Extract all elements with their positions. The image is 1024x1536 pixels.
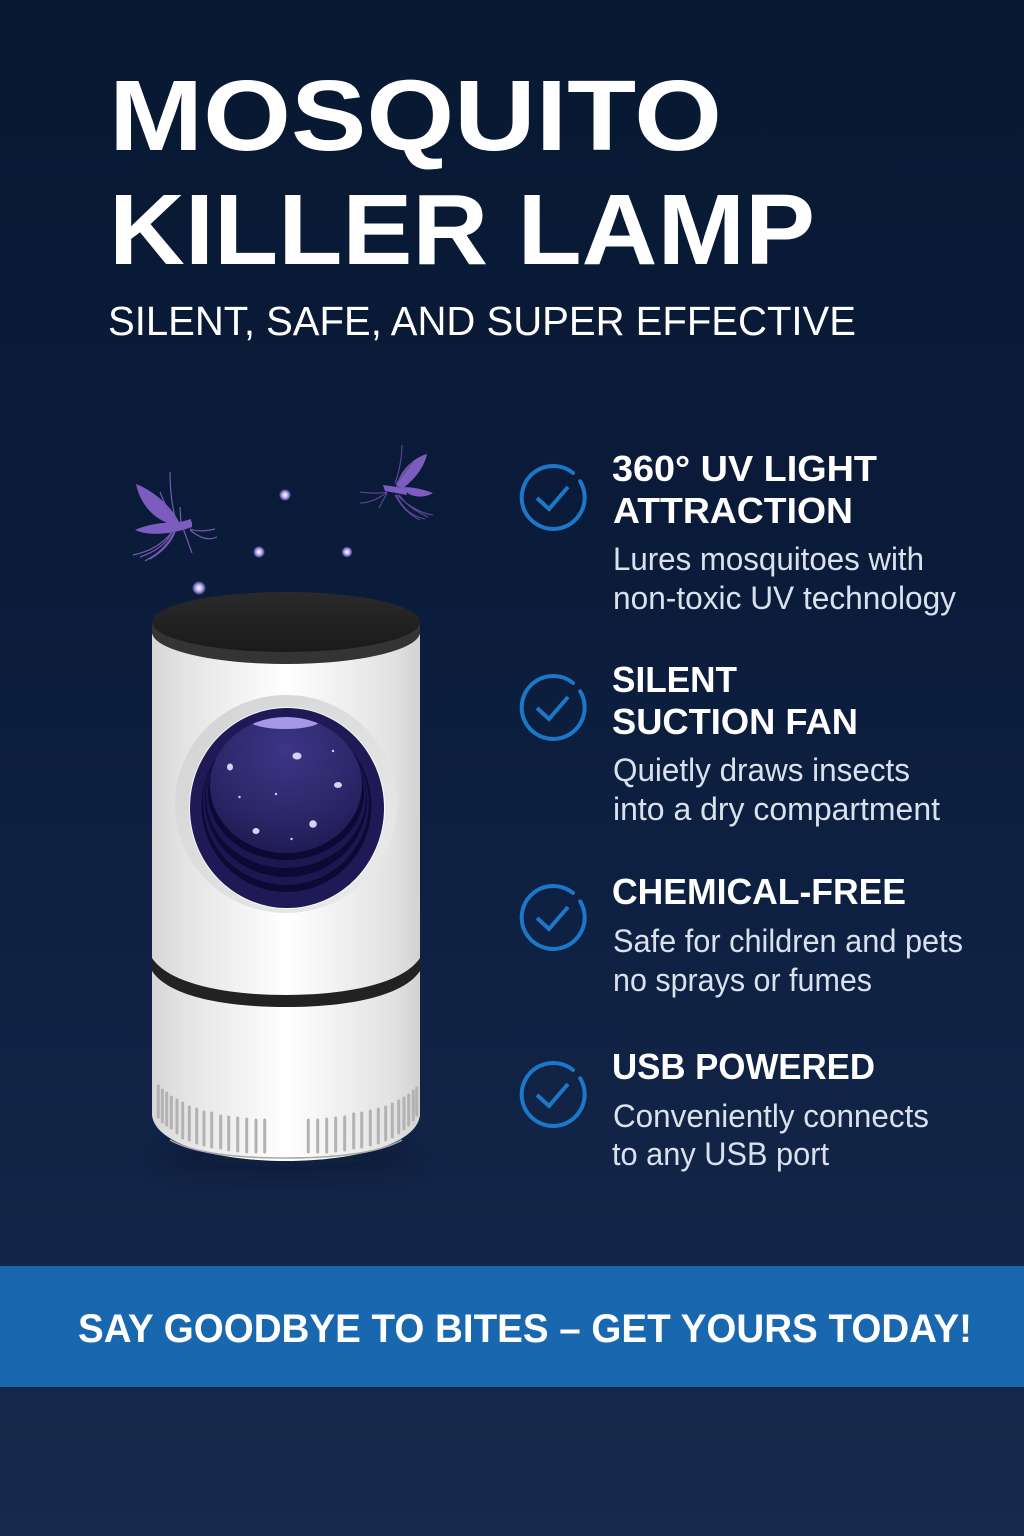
description: to any USB port [612, 1136, 829, 1172]
title [109, 60, 815, 286]
title: KILLER LAMP [109, 174, 815, 286]
right vents [308, 1088, 417, 1152]
heading: 360° UV LIGHT [612, 448, 877, 489]
description: non-toxic UV technology [613, 580, 956, 616]
subtitle: SILENT, SAFE, AND SUPER EFFECTIVE [108, 298, 856, 344]
icon: check circle [522, 466, 585, 529]
lamp shadow [151, 1148, 421, 1168]
description: Quietly draws insects [613, 752, 910, 788]
dark band [152, 958, 420, 1007]
floating light particles [192, 489, 352, 595]
heading: SUCTION FAN [612, 701, 858, 742]
icon: left mosquito [133, 472, 217, 561]
heading: ATTRACTION [613, 490, 853, 531]
window [175, 695, 397, 913]
description [613, 541, 956, 616]
description: Conveniently connects [613, 1098, 929, 1134]
left vents [158, 1086, 265, 1152]
description: into a dry compartment [613, 791, 940, 827]
inner dome [210, 717, 362, 853]
feature: 360 UV light attraction [522, 448, 956, 616]
icon: check circle [522, 886, 585, 949]
description [613, 923, 963, 998]
description: no sprays or fumes [613, 962, 872, 998]
lamp cap [152, 592, 420, 664]
top glow [252, 717, 318, 729]
lamp body [152, 634, 420, 1161]
title: MOSQUITO [109, 60, 722, 172]
glowing specks [227, 750, 342, 840]
description: Lures mosquitoes with [613, 541, 924, 577]
feature: silent suction fan [522, 659, 940, 827]
description: Safe for children and pets [613, 923, 963, 959]
base rim line [170, 1140, 402, 1158]
banner text: SAY GOODBYE TO BITES – GET YOURS TODAY! [78, 1307, 972, 1351]
feature: USB powered [522, 1046, 929, 1172]
illustration: mosquito lamp [151, 592, 421, 1168]
icon: right mosquito [360, 445, 433, 520]
heading [612, 448, 877, 531]
icon: check circle [522, 676, 585, 739]
heading: SILENT [612, 659, 737, 700]
description [613, 752, 940, 827]
icon: check circle [522, 1063, 585, 1126]
heading [612, 659, 858, 742]
description [612, 1098, 929, 1172]
heading: CHEMICAL-FREE [612, 871, 906, 912]
heading: USB POWERED [612, 1046, 875, 1087]
call-to-action banner [0, 1266, 1024, 1387]
feature: chemical-free [522, 871, 963, 998]
